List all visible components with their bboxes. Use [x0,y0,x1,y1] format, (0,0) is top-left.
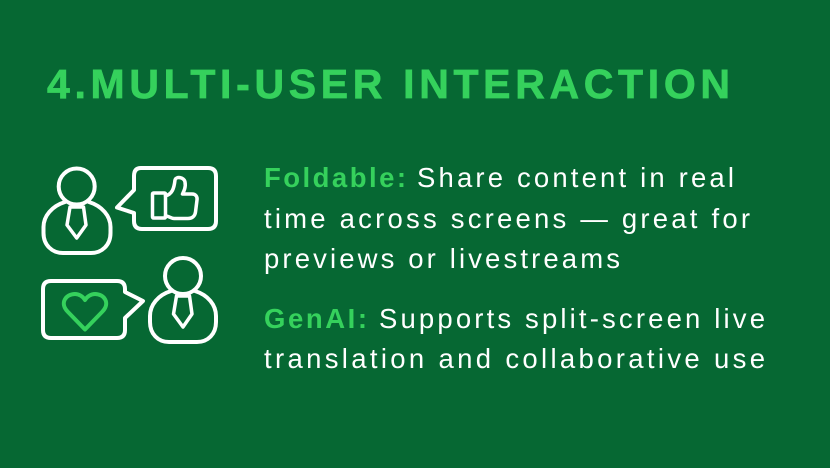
text block: foldable: Share content in real [417,162,734,193]
icon: top user [44,168,110,253]
text block: GenAI: GenAI: [264,303,367,334]
icon: speech bubble with heart [43,281,143,338]
icon: speech bubble with thumbs up [117,168,216,229]
text block: GenAI: translation and collaborative use [264,343,765,374]
icon: bottom user [150,258,216,342]
text block: GenAI [264,303,765,374]
text block: foldable: time across screens — great for [264,203,750,234]
icon: heart [64,294,106,330]
icon: two users exchanging reactions [43,168,216,342]
text block: foldable: previews or livestreams [264,243,620,274]
text block: GenAI: Supports split-screen live [379,303,765,334]
title: 4.MULTI-USER INTERACTION [47,61,730,107]
text block: foldable [264,162,750,274]
text block: foldable: Foldable: [264,162,406,193]
